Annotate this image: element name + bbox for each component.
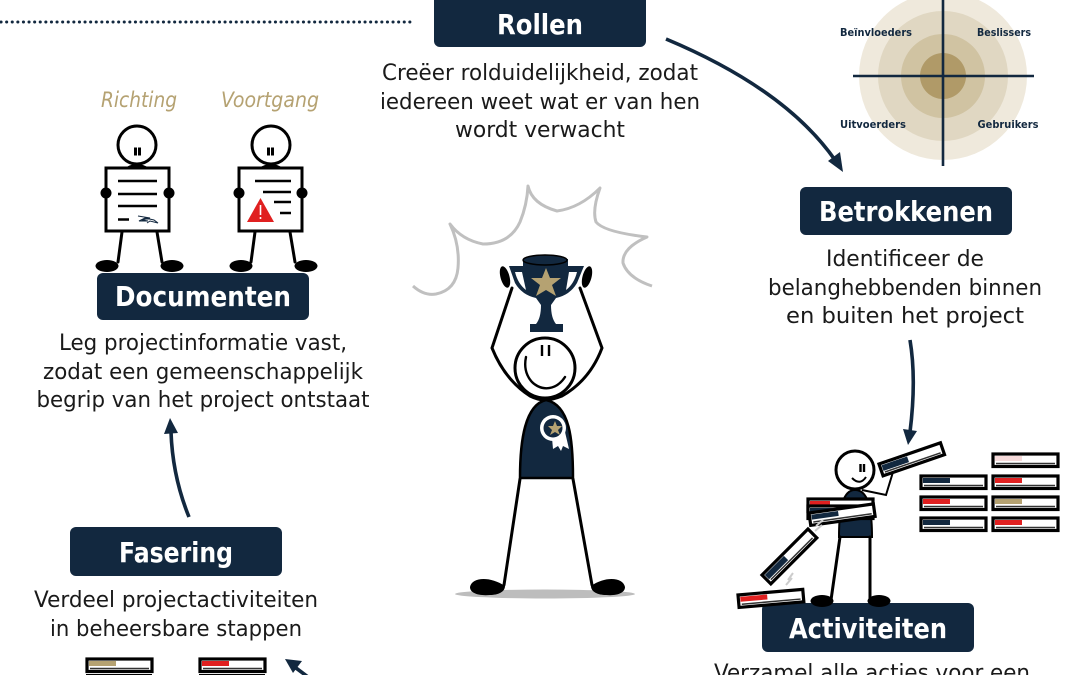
text block: Fasering: Verdeel projectactiviteiten [34, 587, 318, 613]
heading: Fasering: Fasering [119, 536, 233, 569]
chart: stakeholder circles: Gebruikers [978, 118, 1039, 131]
bars: activity stack [921, 454, 1058, 530]
heading: Documenten: Documenten [115, 280, 291, 313]
head [515, 338, 575, 398]
heading: Fasering [70, 527, 282, 576]
heading: Betrokkenen: Betrokkenen [819, 195, 993, 228]
text block: Rollen: Creëer rolduidelijkheid, zodat [382, 60, 698, 86]
figure: person stacking activities [738, 443, 945, 607]
hands [498, 265, 512, 289]
legs and feet [504, 479, 592, 585]
text block: Rollen: iedereen weet wat er van hen [380, 89, 700, 115]
text block: Fasering: in beheersbare stappen [50, 616, 302, 642]
chart: stakeholder circles [840, 0, 1039, 166]
text block: Fasering [34, 587, 318, 642]
text block: Documenten: begrip van het project ontstaat [36, 387, 370, 413]
figure: Richting: Richting [101, 88, 177, 112]
figure: Richting [96, 88, 184, 272]
text block: Documenten: Leg projectinformatie vast, [59, 330, 347, 356]
bars: Fasering [86, 659, 265, 675]
arrow: Fasering to Documenten [164, 418, 189, 517]
chart: stakeholder circles: Uitvoerders [840, 118, 906, 131]
figure: winner with trophy [455, 255, 635, 598]
shadow [455, 590, 635, 598]
heading: Documenten [97, 273, 309, 320]
text block: Rollen: wordt verwacht [455, 117, 625, 143]
arms [492, 288, 602, 400]
trophy [509, 255, 584, 332]
torso [520, 400, 573, 478]
arrow: into Fasering bars [285, 659, 312, 675]
chart: stakeholder circles: Beslissers [977, 26, 1031, 39]
rosette [540, 415, 569, 451]
text block: Documenten [36, 330, 370, 413]
text block: Documenten: zodat een gemeenschappelijk [43, 359, 363, 385]
text block: Betrokkenen: en buiten het project [786, 303, 1024, 329]
heading: Rollen [434, 0, 646, 47]
text block: Betrokkenen: Identificeer de [826, 246, 984, 272]
heading: Activiteiten: Activiteiten [789, 612, 947, 645]
text block: Betrokkenen: belanghebbenden binnen [768, 275, 1042, 301]
arrow: Betrokkenen to Activiteiten [903, 340, 917, 445]
figure: Voortgang [221, 88, 319, 272]
burst [413, 186, 652, 294]
figure: Voortgang: Voortgang [221, 88, 319, 112]
chart: stakeholder circles: Beïnvloeders [840, 26, 912, 39]
heading: Rollen: Rollen [497, 8, 583, 41]
text block: Rollen [380, 60, 700, 143]
heading: Activiteiten [762, 603, 974, 652]
heading: Betrokkenen [800, 187, 1012, 235]
text block: Betrokkenen [768, 246, 1042, 329]
arrow: Rollen to Betrokkenen [666, 39, 843, 172]
